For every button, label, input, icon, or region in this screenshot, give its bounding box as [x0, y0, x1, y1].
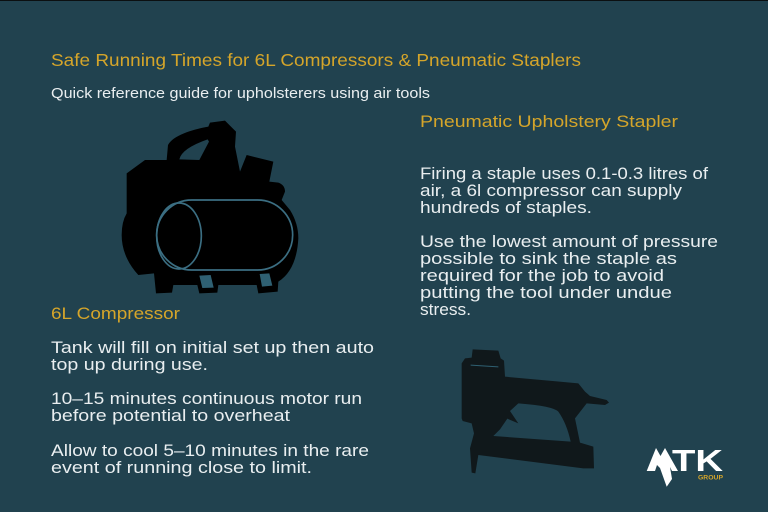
- heading: 6L Compressor: 6L Compressor: [51, 304, 180, 323]
- subtitle: Quick reference guide for upholsterers using air tools: [51, 86, 430, 102]
- text block: stapler notes: air, a 6l compressor can supply: [420, 181, 683, 200]
- text block: stapler notes: stress.: [420, 300, 471, 319]
- logo: MTK Group: TK: [672, 443, 724, 478]
- text block: stapler notes: required for the job to avoid: [420, 266, 664, 285]
- text block: compressor notes: [51, 338, 374, 477]
- icon: air compressor: [122, 121, 298, 293]
- logo: MTK Group: GROUP: [698, 474, 724, 482]
- text block: stapler notes: Use the lowest amount of pressure: [420, 232, 718, 251]
- logo: MTK Group: [647, 443, 724, 487]
- text block: compressor notes: 10–15 minutes continuous motor run: [51, 389, 362, 408]
- text block: compressor notes: event of running close to limit.: [51, 458, 312, 477]
- text block: compressor notes: top up during use.: [51, 355, 208, 374]
- heading: Pneumatic Upholstery Stapler: Pneumatic Upholstery Stapler: [420, 112, 678, 131]
- text block: compressor notes: before potential to overheat: [51, 406, 290, 425]
- text block: stapler notes: Firing a staple uses 0.1-0.3 litres of: [420, 164, 708, 183]
- text block: compressor notes: Tank will fill on initial set up then auto: [51, 338, 374, 357]
- text block: stapler notes: putting the tool under undue: [420, 283, 672, 302]
- text block: stapler notes: hundreds of staples.: [420, 198, 592, 217]
- text block: stapler notes: [420, 164, 718, 319]
- text block: stapler notes: possible to sink the staple as: [420, 249, 677, 268]
- title: Safe Running Times for 6L Compressors & Pneumatic Staplers: [51, 50, 581, 70]
- text block: compressor notes: Allow to cool 5–10 minutes in the rare: [51, 441, 369, 460]
- icon: pneumatic stapler: [462, 349, 609, 473]
